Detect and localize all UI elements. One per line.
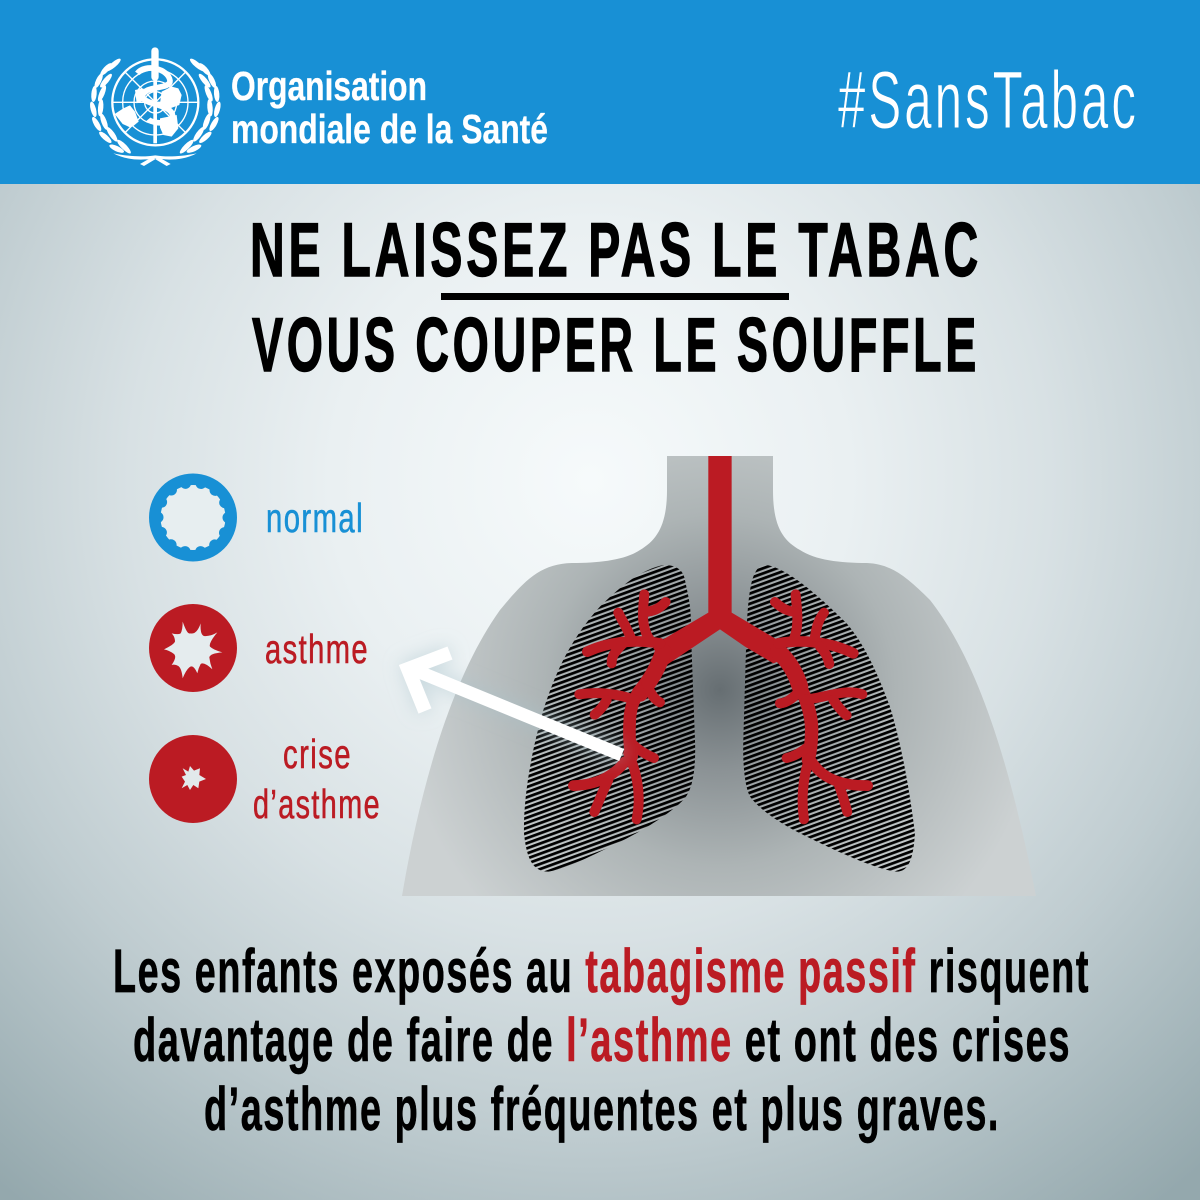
label: asthme: asthme [265, 626, 369, 672]
label: crise d'asthme: crise [283, 731, 352, 777]
legend: airway states [149, 474, 381, 827]
label: normal: normal [266, 495, 364, 541]
icon: normal airway [149, 474, 237, 562]
label: crise d'asthme [253, 731, 381, 827]
logo text: organisation name: mondiale de la Santé [231, 106, 548, 152]
arrow [408, 653, 622, 755]
header band [0, 0, 1200, 184]
torso silhouette [402, 456, 1036, 896]
logo: WHO emblem [89, 47, 222, 166]
lungs hatching [524, 565, 915, 872]
icon: asthma attack airway [149, 735, 237, 823]
lungs illustration [402, 456, 1036, 896]
icon: asthma airway [149, 604, 237, 692]
body text [113, 937, 1090, 1143]
bronchial tree [573, 456, 868, 819]
title [250, 208, 982, 388]
logo text: organisation name [231, 63, 548, 152]
logo text: organisation name: Organisation [231, 63, 427, 109]
body text: Les enfants exposés au tabagisme passif risquent [113, 937, 1090, 1005]
label: crise d'asthme: d’asthme [253, 781, 381, 827]
